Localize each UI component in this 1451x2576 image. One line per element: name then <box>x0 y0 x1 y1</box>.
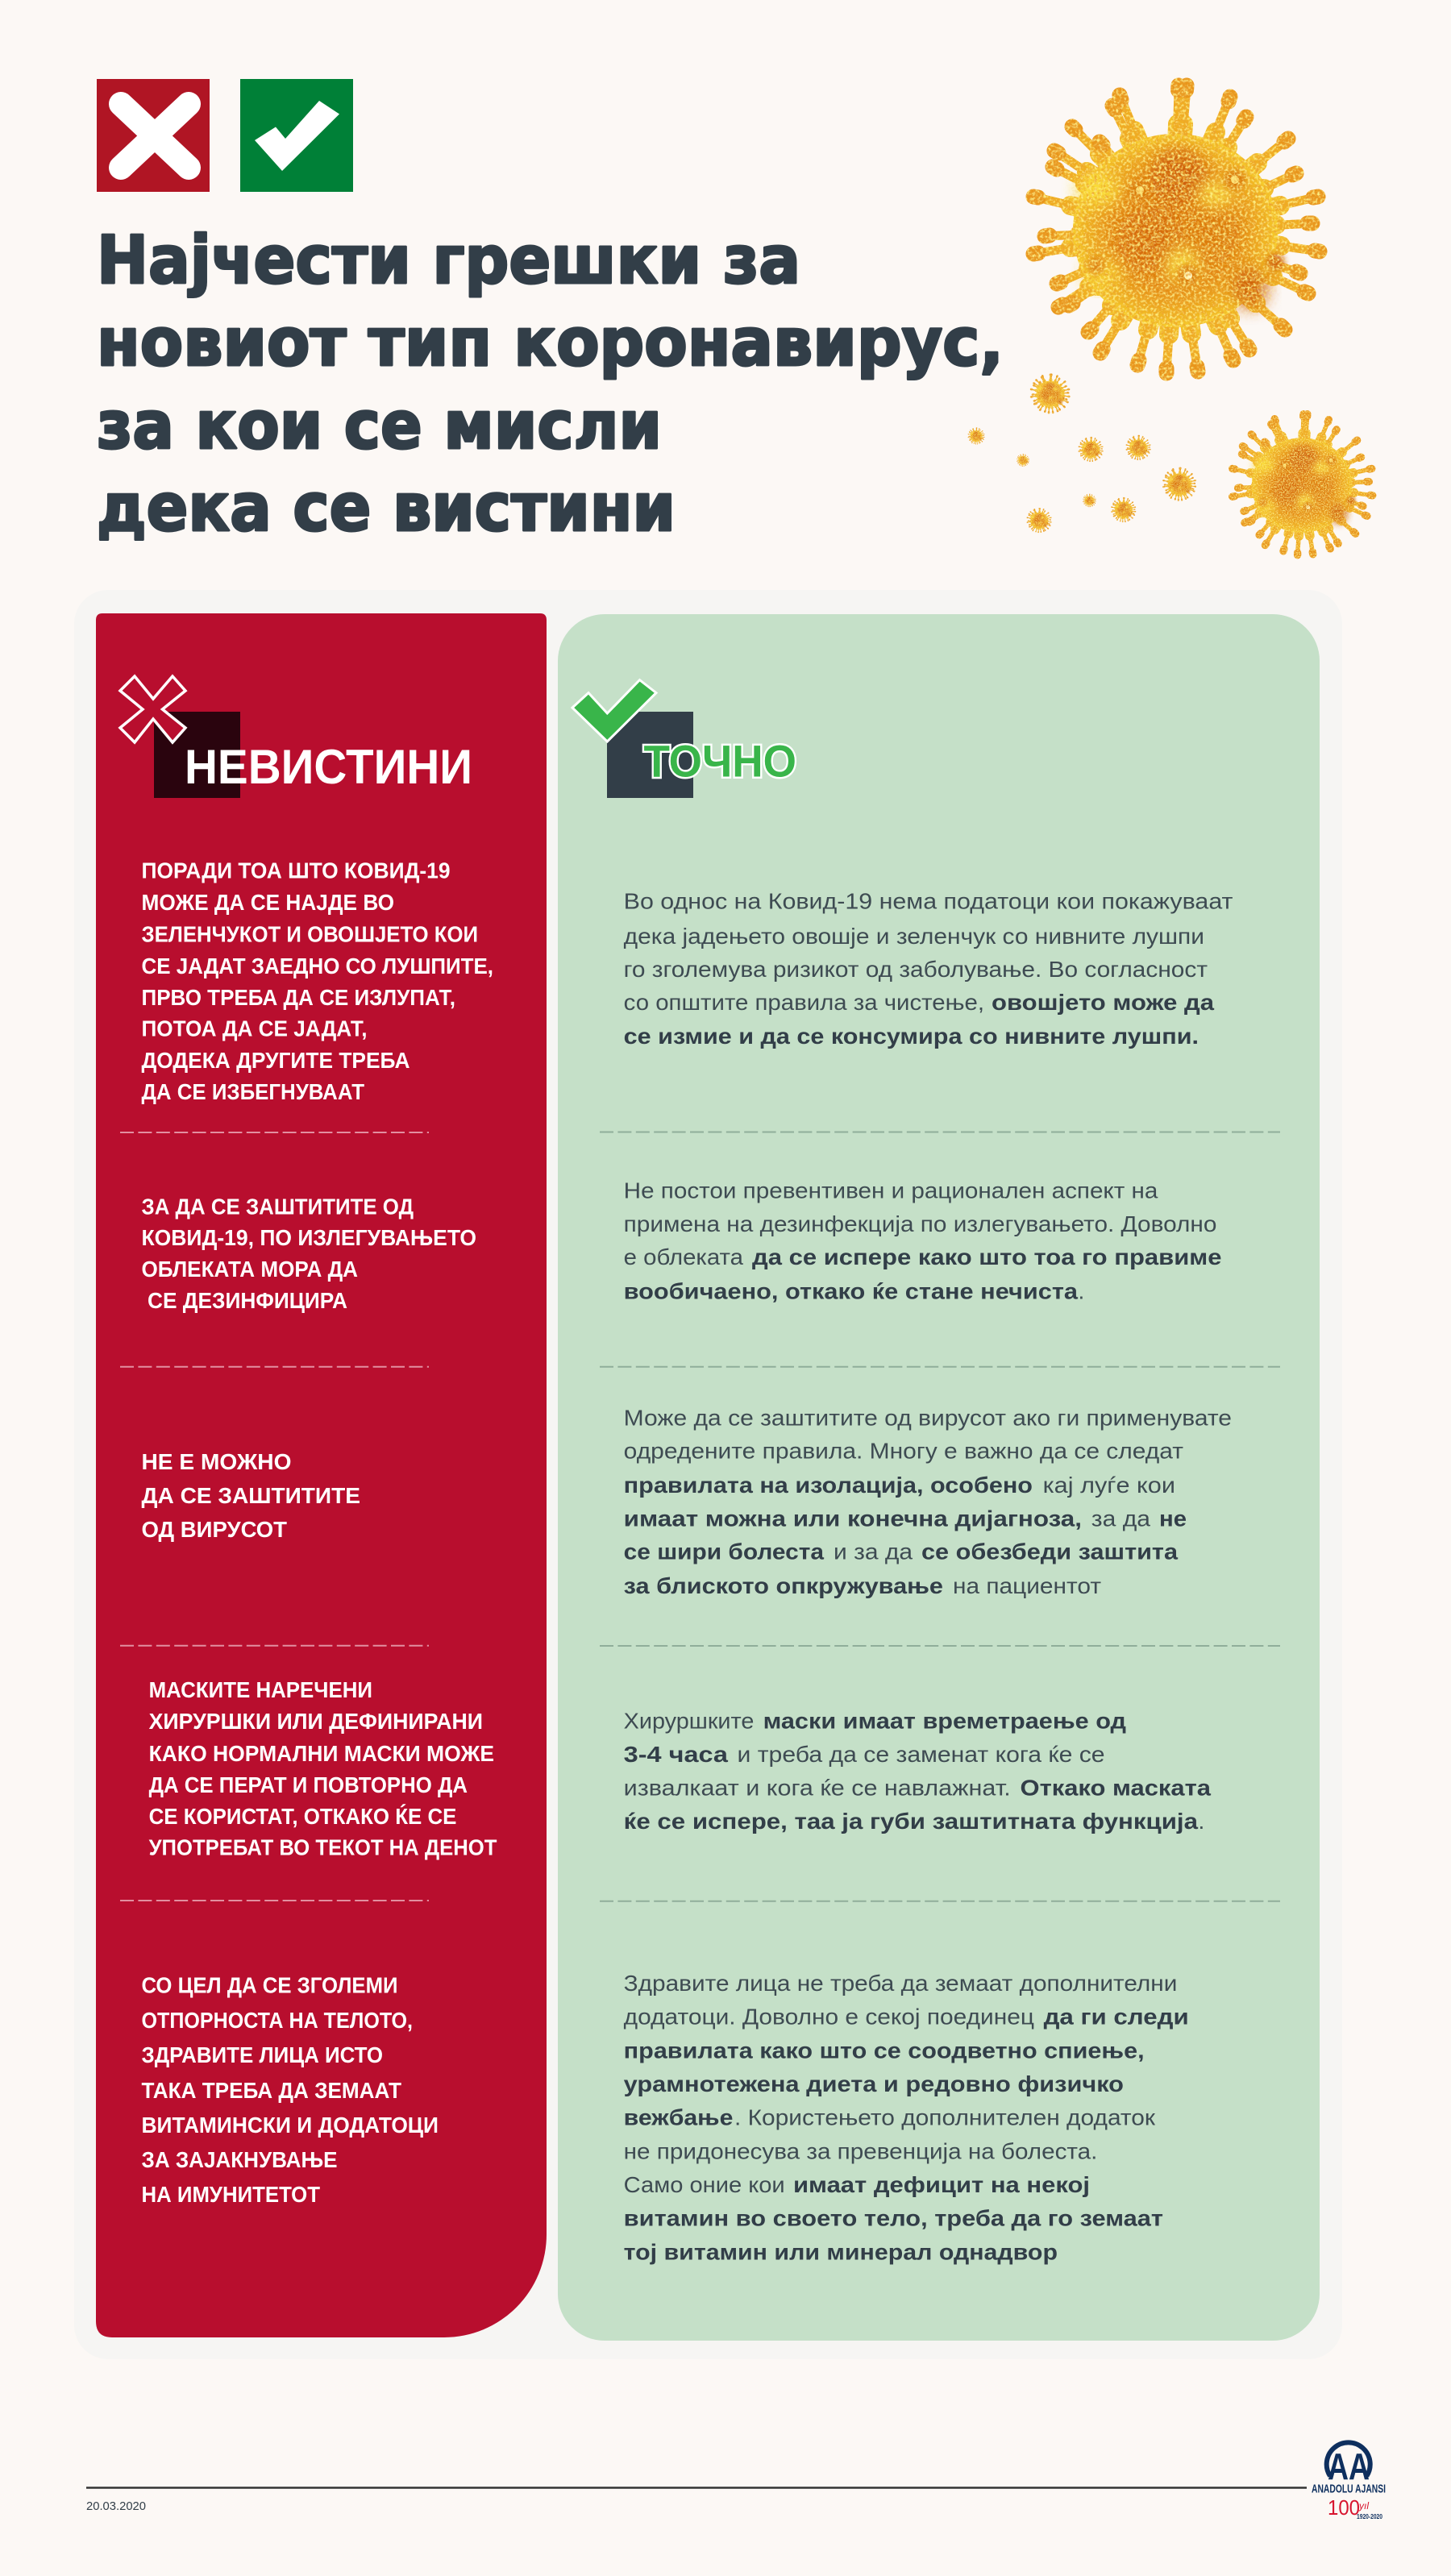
fact 1 <box>624 888 1233 1049</box>
false claim 3: НЕ Е МОЖНО <box>142 1449 292 1474</box>
fact 3: правилата на изолација, особено <box>624 1473 1033 1498</box>
false claim 3 <box>142 1449 360 1542</box>
false claim 2: ОБЛЕКАТА МОРА ДА <box>142 1257 358 1282</box>
false claim 4 <box>149 1677 497 1860</box>
fact 3: одредените правила. Многу е важно да се следат <box>624 1439 1183 1464</box>
logo: Anadolu Ajansi: 1920-2020 <box>1357 2513 1382 2520</box>
false claim 5 <box>142 1973 439 2207</box>
fact 5: витамин во своето тело, треба да го земаат <box>624 2206 1163 2231</box>
false claim 1: ЗЕЛЕНЧУКОТ И ОВОШЈЕТО КОИ <box>142 922 478 947</box>
fact 5 <box>624 1971 1189 2265</box>
fact 5: урамнотежена диета и редовно физичко <box>624 2071 1124 2096</box>
fact 1: овошјето може да <box>992 990 1214 1015</box>
fact 2: . <box>1079 1278 1084 1303</box>
false claim 1: ДОДЕКА ДРУГИТЕ ТРЕБА <box>142 1048 410 1073</box>
false claim 4: КАКО НОРМАЛНИ МАСКИ МОЖЕ <box>149 1741 494 1766</box>
illustration: medium coronavirus <box>1233 414 1373 555</box>
fact 5: правилата како што се соодветно спиење, <box>624 2038 1145 2063</box>
false claim 1 <box>142 858 493 1104</box>
fact 4: Откако маската <box>1021 1775 1211 1801</box>
heading: square behind НЕВИСТИНИ <box>154 712 240 798</box>
fact 2: примена на дезинфекција по излегувањето. Доволно <box>624 1211 1216 1236</box>
panel: outer container <box>74 590 1342 2359</box>
false claim 2: ЗА ДА СЕ ЗАШТИТИТЕ ОД <box>142 1194 414 1219</box>
false claim 5: ЗДРАВИТЕ ЛИЦА ИСТО <box>142 2042 383 2067</box>
false claim 4: СЕ КОРИСТАТ, ОТКАКО ЌЕ СЕ <box>149 1804 456 1829</box>
fact 4: ќе се испере, таа ја губи заштитната функција <box>624 1809 1198 1834</box>
icon: outlined check <box>572 680 656 742</box>
icon: green check square <box>240 79 353 192</box>
fact 4: извалкаат и кога ќе се навлажнат. <box>624 1775 1011 1801</box>
fact 3: имаат можна или конечна дијагноза, <box>624 1506 1082 1531</box>
date: 20.03.2020 <box>86 2499 146 2513</box>
fact 1: се измие и да се консумира со нивните лушпи. <box>624 1024 1199 1049</box>
fact 3: кај луѓе кои <box>1043 1473 1175 1498</box>
fact 4 <box>624 1708 1211 1834</box>
false claim 2 <box>142 1194 476 1313</box>
false claim 4: ХИРУРШКИ ИЛИ ДЕФИНИРАНИ <box>149 1709 483 1734</box>
panel: false claims (red column) <box>96 613 547 2337</box>
false claim 5: ТАКА ТРЕБА ДА ЗЕМААТ <box>142 2078 401 2103</box>
false claim 1: МОЖЕ ДА СЕ НАЈДЕ ВО <box>142 890 394 915</box>
fact 3 <box>624 1406 1232 1598</box>
false claim 1: СЕ ЈАДАТ ЗАЕДНО СО ЛУШПИТЕ, <box>142 954 493 978</box>
fact 5: Здравите лица не треба да земаат дополнителни <box>624 1971 1177 1996</box>
fact 3: на пациентот <box>953 1573 1101 1598</box>
illustration: small virus particles <box>968 375 1195 532</box>
title: новиот тип коронавирус, <box>97 305 1004 381</box>
logo: Anadolu Ajansi <box>1312 2442 1386 2520</box>
fact 1: го зголемува ризикот од заболување. Во согласност <box>624 957 1208 982</box>
fact 5: додатоци. Доволно е секој поединец <box>624 2005 1034 2030</box>
icon: red cross square <box>97 79 210 192</box>
fact 3: не <box>1159 1506 1187 1531</box>
fact 4: . <box>1198 1809 1204 1834</box>
false claim 3: ОД ВИРУСОТ <box>142 1517 287 1542</box>
fact 3: Може да се заштитите од вирусот ако ги применувате <box>624 1406 1232 1431</box>
false claim 1: ПОРАДИ ТОА ШТО КОВИД-19 <box>142 858 450 883</box>
fact 2: е облеката <box>624 1244 743 1269</box>
false claim 3: ДА СЕ ЗАШТИТИТЕ <box>142 1483 360 1508</box>
fact 5: . Користењето дополнителен додаток <box>734 2105 1156 2130</box>
title: Најчести грешки за <box>97 222 800 299</box>
fact 5: Само оние кои <box>624 2172 785 2197</box>
illustration: large coronavirus <box>1033 85 1320 373</box>
fact 2: да се испере како што тоа го правиме <box>752 1244 1222 1269</box>
heading: НЕВИСТИНИ: НЕВИСТИНИ <box>185 740 472 794</box>
fact 5: да ги следи <box>1044 2005 1189 2030</box>
logo: Anadolu Ajansi: yıl <box>1358 2500 1369 2512</box>
heading: square behind ТОЧНО <box>607 712 693 798</box>
false claim 4: УПОТРЕБАТ ВО ТЕКОТ НА ДЕНОТ <box>149 1834 497 1860</box>
fact 1: Во однос на Ковид-19 нема податоци кои покажуваат <box>624 888 1233 914</box>
fact 5: не придонесува за превенција на болеста. <box>624 2139 1097 2164</box>
false claim 5: ВИТАМИНСКИ И ДОДАТОЦИ <box>142 2113 439 2138</box>
false claim 5: ОТПОРНОСТА НА ТЕЛОТО, <box>142 2008 413 2033</box>
fact 3: за да <box>1091 1506 1150 1531</box>
footer rule <box>86 2487 1307 2489</box>
title <box>97 222 1004 546</box>
fact 4: Хируршките <box>624 1708 754 1733</box>
fact 5: имаат дефицит на некој <box>793 2172 1090 2197</box>
false claim 1: ПРВО ТРЕБА ДА СЕ ИЗЛУПАТ, <box>142 985 455 1010</box>
fact 3: се обезбеди заштита <box>921 1539 1178 1564</box>
logo: Anadolu Ajansi: AA <box>1328 2445 1370 2487</box>
false claim 5: ЗА ЗАЈАКНУВАЊЕ <box>142 2147 337 2172</box>
panel: correct facts (green column) <box>558 614 1320 2341</box>
fact 3: се шири болеста <box>624 1539 824 1564</box>
fact 4: маски имаат времетраење од <box>763 1708 1126 1733</box>
false claim 1: ПОТОА ДА СЕ ЈАДАТ, <box>142 1016 368 1041</box>
fact 4: 3-4 часа <box>624 1742 728 1767</box>
false claim 4: ДА СЕ ПЕРАТ И ПОВТОРНО ДА <box>149 1772 468 1797</box>
false claim 2: КОВИД-19, ПО ИЗЛЕГУВАЊЕТО <box>142 1225 476 1250</box>
icon: outlined X <box>120 676 185 742</box>
fact 5: вежбање <box>624 2105 733 2130</box>
false claim 4: МАСКИТЕ НАРЕЧЕНИ <box>149 1677 372 1702</box>
false claim 1: ДА СЕ ИЗБЕГНУВААТ <box>142 1079 364 1104</box>
fact 2: Не постои превентивен и рационален аспект на <box>624 1178 1158 1203</box>
heading: ТОЧНО: ТОЧНО <box>643 735 796 787</box>
fact 5: тој витамин или минерал однадвор <box>624 2239 1058 2265</box>
false claim 5: СО ЦЕЛ ДА СЕ ЗГОЛЕМИ <box>142 1973 398 1998</box>
title: за кои се мисли <box>97 388 662 464</box>
fact 4: и треба да се заменат кога ќе се <box>737 1742 1105 1767</box>
fact 2: вообичаено, откако ќе стане нечиста <box>624 1278 1078 1303</box>
fact 3: за блиското опкружување <box>624 1573 943 1598</box>
fact 1: дека јадењето овошје и зеленчук со нивните лушпи <box>624 924 1204 949</box>
false claim 5: НА ИМУНИТЕТОТ <box>142 2182 320 2207</box>
logo: Anadolu Ajansi: ANADOLU AJANSI <box>1312 2483 1386 2496</box>
fact 3: и за да <box>834 1539 913 1564</box>
logo: Anadolu Ajansi: 100 <box>1328 2495 1360 2520</box>
fact 1: со општите правила за чистење, <box>624 990 984 1015</box>
false claim 2: СЕ ДЕЗИНФИЦИРА <box>148 1288 347 1313</box>
fact 2 <box>624 1178 1222 1303</box>
title: дека се вистини <box>97 470 676 546</box>
